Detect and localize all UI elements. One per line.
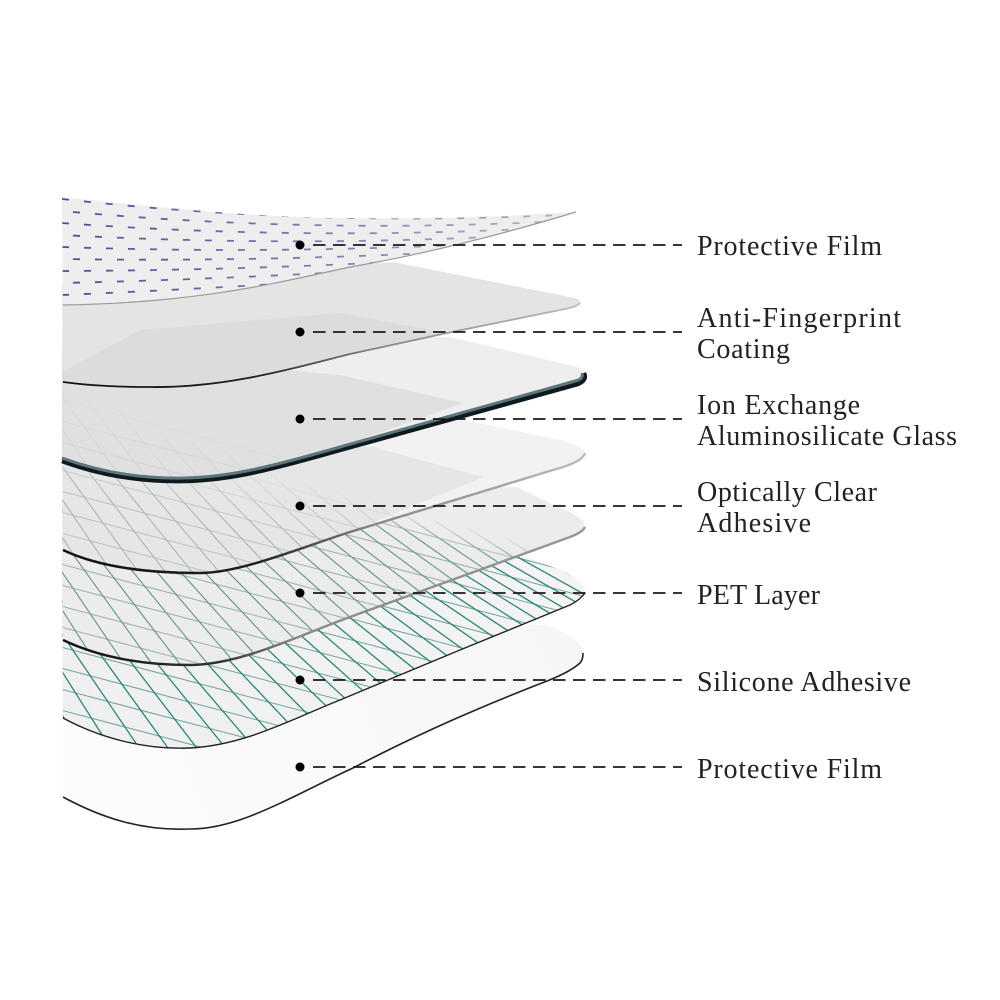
layer: ion exchange aluminosilicate glass xyxy=(61,330,588,484)
label: Ion Exchange Aluminosilicate Glass: Aluminosilicate Glass xyxy=(697,421,957,452)
label: Silicone Adhesive: Silicone Adhesive xyxy=(697,667,911,698)
label: Anti-Fingerprint Coating: Coating xyxy=(697,334,790,365)
label: Ion Exchange Aluminosilicate Glass: Ion Exchange xyxy=(697,390,860,421)
label: Optically Clear Adhesive xyxy=(697,477,878,539)
label: Optically Clear Adhesive: Optically Clear xyxy=(697,477,878,508)
layer: anti-fingerprint coating xyxy=(62,262,580,387)
layer: PET xyxy=(62,487,586,666)
label: Anti-Fingerprint Coating: Anti-Fingerprint xyxy=(697,303,901,334)
leader dots xyxy=(296,240,304,772)
label: Ion Exchange Aluminosilicate Glass xyxy=(697,390,957,452)
layer: top protective film with dots xyxy=(62,197,580,307)
label: Protective Film: Protective Film xyxy=(697,231,882,262)
layer: optically clear adhesive xyxy=(62,420,586,574)
leader lines xyxy=(313,245,682,767)
label: Optically Clear Adhesive: Adhesive xyxy=(697,508,811,539)
layer: bottom protective film xyxy=(62,620,583,829)
label: Protective Film bottom: Protective Film xyxy=(697,754,882,785)
label: Anti-Fingerprint Coating xyxy=(697,303,901,365)
label: PET Layer: PET Layer xyxy=(697,580,821,611)
layer: silicone adhesive mesh xyxy=(62,557,586,749)
